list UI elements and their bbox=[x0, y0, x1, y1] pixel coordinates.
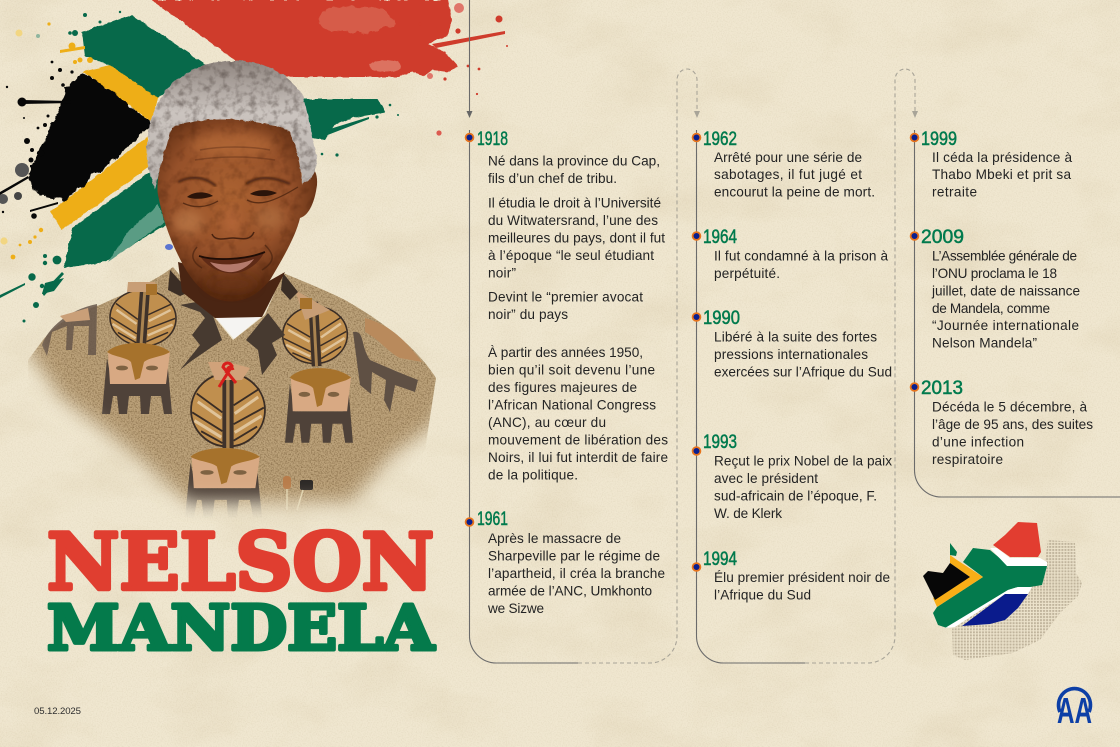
flag: red band bbox=[152, 0, 508, 136]
column 1 bbox=[477, 129, 668, 616]
entry: 2009 bbox=[921, 227, 1080, 350]
entry: 1993 bbox=[703, 432, 892, 521]
entry: 1961 bbox=[477, 509, 665, 616]
shirt: left shoulder motif bbox=[42, 304, 97, 356]
entry: 1964: 1964 bbox=[703, 227, 737, 248]
portrait: red ribbon bbox=[219, 363, 236, 387]
entry: 1994: Élu premier président noir de bbox=[714, 570, 890, 585]
entry: 1961: we Sizwe bbox=[487, 601, 544, 616]
entry: 1918: noir” bbox=[488, 266, 516, 280]
entry: 1918: bien qu’il soit devenu l’une bbox=[488, 362, 655, 378]
portrait: shirt bbox=[28, 267, 436, 530]
entry: 2013: respiratoire bbox=[932, 452, 1003, 467]
portrait: Nelson Mandela bbox=[28, 61, 436, 530]
title: NELSON: NELSON bbox=[47, 517, 434, 608]
shirt: pen and badge bbox=[283, 476, 313, 510]
portrait: face bbox=[157, 118, 317, 301]
entry: 1918: Né dans la province du Cap, bbox=[488, 154, 660, 168]
face: nose and wrinkles bbox=[193, 147, 275, 270]
map: South Africa in flag colours bbox=[923, 522, 1047, 628]
face: smile bbox=[199, 252, 265, 273]
portrait: grey hair bbox=[147, 61, 317, 190]
map: South Africa dotted shadow bbox=[952, 540, 1082, 660]
flag: black triangle bbox=[0, 61, 154, 219]
entry: 1999 bbox=[921, 129, 1072, 200]
entry: 1961: Après le massacre de bbox=[488, 531, 621, 546]
entry: 2013: Décéda le 5 décembre, à bbox=[932, 400, 1087, 414]
entry: 2009: juillet, date de naissance bbox=[931, 284, 1080, 298]
face: brows and eyes bbox=[178, 178, 298, 207]
entry: 1999: Il céda la présidence à bbox=[932, 150, 1072, 165]
entry: 2009: Nelson Mandela” bbox=[932, 336, 1037, 350]
entry: 1918: mouvement de libération des bbox=[488, 432, 668, 448]
entry: 1994: l’Afrique du Sud bbox=[714, 588, 811, 602]
entry: 1990 bbox=[703, 308, 892, 380]
entry: 1964: perpétuité. bbox=[714, 266, 780, 281]
entry: 1918: l’African National Congress bbox=[488, 398, 656, 412]
entry: 1961: l’apartheid, il créa la branche bbox=[488, 566, 665, 581]
entry: 1990: 1990 bbox=[703, 308, 740, 329]
entry: 1918: Noirs, il lui fut interdit de faire bbox=[488, 450, 668, 465]
entry: 1961: armée de l’ANC, Umkhonto bbox=[488, 584, 652, 598]
entry: 1962: Arrêté pour une série de bbox=[714, 150, 862, 165]
entry: 1961: 1961 bbox=[477, 509, 508, 530]
entry: 1918: À partir des années 1950, bbox=[488, 345, 643, 360]
shirt: right shoulder motif bbox=[353, 318, 422, 412]
entry: 2009: l’ONU proclama le 18 bbox=[932, 266, 1057, 281]
entry: 2013: l’âge de 95 ans, des suites bbox=[932, 417, 1093, 432]
title: MANDELA: MANDELA bbox=[47, 592, 435, 664]
entry: 2013: d’une infection bbox=[932, 434, 1024, 450]
logo: Anadolu Agency bbox=[1057, 689, 1092, 731]
entry: 1962: 1962 bbox=[703, 129, 737, 150]
column 2 bbox=[703, 129, 892, 602]
arrow heads bbox=[466, 111, 918, 118]
entry: 1962: encourut la peine de mort. bbox=[714, 184, 875, 200]
entry: 1993: sud-africain de l’époque, F. bbox=[714, 488, 877, 504]
entry: 1918: fils d’un chef de tribu. bbox=[488, 171, 617, 186]
entry: 1994 bbox=[703, 549, 890, 602]
entry: 1918: à l’époque “le seul étudiant bbox=[488, 248, 654, 263]
entry: 1990: Libéré à la suite des fortes bbox=[714, 330, 877, 344]
entry: 2013: 2013 bbox=[921, 378, 963, 399]
entry: 1918: Devint le “premier avocat bbox=[488, 290, 643, 304]
entry: 1993: 1993 bbox=[703, 432, 737, 453]
entry: 1964 bbox=[703, 227, 888, 281]
shirt: collar bbox=[168, 270, 298, 375]
entry: 1999: 1999 bbox=[921, 129, 957, 150]
entry: 1993: avec le président bbox=[714, 471, 818, 486]
entry: 1961: Sharpeville par le régime de bbox=[488, 548, 660, 564]
entry: 1994: 1994 bbox=[703, 549, 737, 570]
entry: 1993: Reçut le prix Nobel de la paix bbox=[714, 454, 892, 468]
entry: 2009: 2009 bbox=[921, 227, 964, 248]
entry: 1999: Thabo Mbeki et prit sa bbox=[932, 167, 1071, 182]
entry: 1962: sabotages, il fut jugé et bbox=[714, 167, 862, 182]
paint: blue fleck bbox=[165, 244, 173, 250]
entry: 1964: Il fut condamné à la prison à bbox=[714, 248, 888, 264]
flag: green chevron bbox=[0, 11, 399, 323]
entry: 2013 bbox=[921, 378, 1093, 467]
entry: 1918: (ANC), au cœur du bbox=[488, 415, 606, 430]
shirt: leaf and mask motifs bbox=[102, 282, 353, 518]
face: forehead and cheek highlights bbox=[173, 133, 284, 292]
timeline: connecting lines bbox=[470, 0, 1120, 663]
entry: 1999: retraite bbox=[932, 184, 977, 200]
title: NELSON MANDELA bbox=[47, 517, 435, 664]
entry: 1962 bbox=[703, 129, 875, 200]
entry: 1918: meilleures du pays, dont il fut bbox=[488, 230, 665, 246]
entry: 2009: de Mandela, comme bbox=[932, 301, 1050, 316]
flag: yellow chevron bbox=[0, 22, 158, 259]
entry: 2009: “Journée internationale bbox=[932, 318, 1079, 333]
entry: 1918: du Witwatersrand, l’une des bbox=[488, 213, 658, 228]
timeline markers bbox=[466, 134, 918, 571]
illustration: South African flag with paint splatter bbox=[0, 0, 508, 322]
column 3 bbox=[921, 129, 1093, 467]
entry: 1918: 1918 bbox=[477, 129, 508, 150]
entry: 1990: pressions internationales bbox=[714, 347, 868, 362]
entry: 2009: L’Assemblée générale de bbox=[932, 248, 1077, 264]
logo: Anadolu Agency: AA bbox=[1057, 690, 1092, 731]
entry: 1990: exercées sur l’Afrique du Sud bbox=[714, 364, 892, 380]
entry: 1993: W. de Klerk bbox=[714, 506, 782, 521]
portrait: neck bbox=[178, 262, 285, 318]
date: 05.12.2025 bbox=[34, 706, 81, 717]
entry: 1918: noir” du pays bbox=[488, 307, 568, 322]
portrait: white undershirt bbox=[216, 317, 261, 339]
entry: 1918: des figures majeures de bbox=[488, 380, 637, 395]
entry: 1918: Il étudia le droit à l’Université bbox=[488, 196, 661, 210]
entry: 1918 bbox=[477, 129, 668, 482]
entry: 1918: de la politique. bbox=[488, 468, 578, 482]
